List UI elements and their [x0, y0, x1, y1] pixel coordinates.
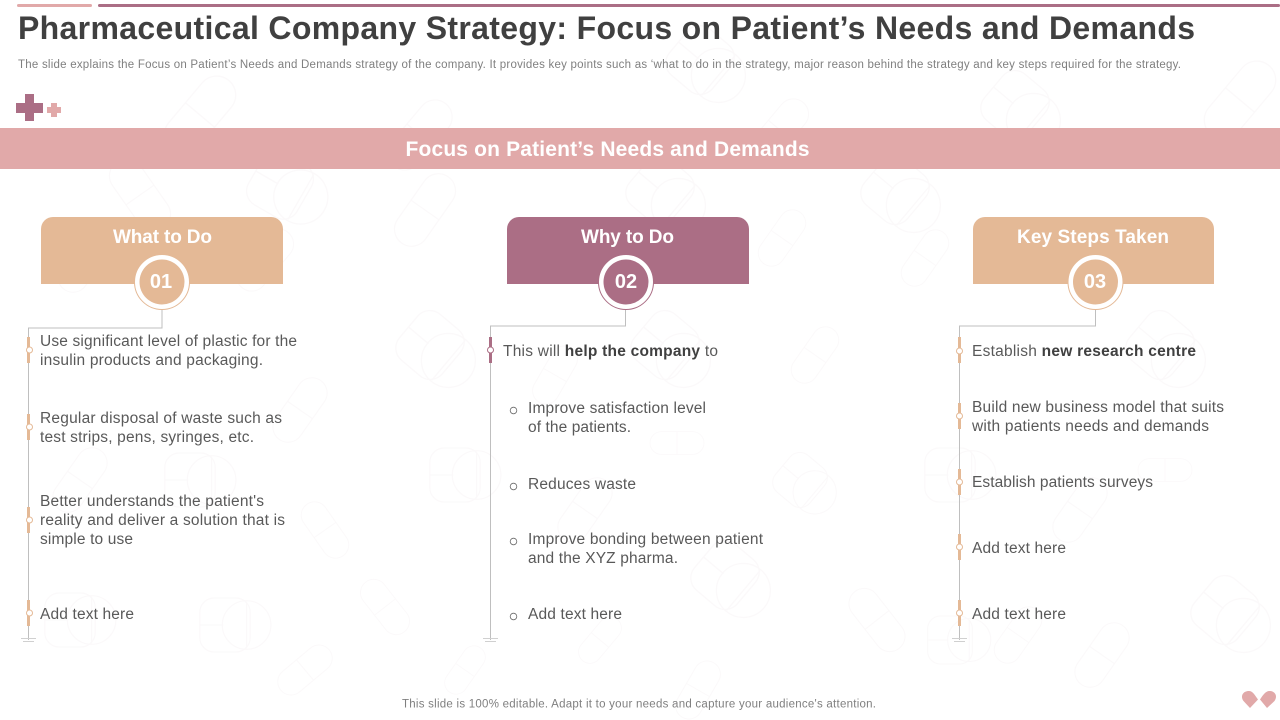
text: key steps items: with patients needs and demands [971, 418, 1209, 435]
text: key steps items: Add text here [972, 606, 1066, 623]
header card: what to do [41, 217, 283, 284]
panel: key steps taken [952, 217, 1224, 642]
text: why to do items: Add text here [528, 606, 622, 623]
header card: key steps taken [973, 217, 1214, 284]
text: what to do items: insulin products and packaging. [40, 352, 263, 369]
panel: what to do [21, 217, 297, 642]
number badge 03: 03 [1084, 271, 1106, 293]
timeline: key steps taken [952, 310, 1096, 642]
text: why to do items: Improve satisfaction level [528, 400, 706, 417]
icon: pink hearts [1242, 691, 1276, 708]
header card: what to do: What to Do [113, 227, 212, 248]
number badge 02 [598, 254, 654, 310]
top accent bars [17, 4, 1280, 7]
banner heading [0, 128, 1280, 169]
text: key steps items: Add text here [972, 540, 1066, 557]
text: what to do items [40, 333, 297, 623]
number badge 01 [134, 254, 190, 310]
number badge 02: 02 [615, 271, 637, 293]
panel: why to do [483, 217, 764, 642]
number badge 03 [1068, 254, 1123, 310]
text: what to do items: Add text here [40, 606, 134, 623]
subtitle: The slide explains the Focus on Patient’s Needs and Demands strategy of the company. It provides key points such as ‘what to do in the strategy, major reason behind the strategy and key steps required for the strategy. [18, 59, 1181, 71]
text: what to do items: test strips, pens, syringes, etc. [40, 429, 254, 446]
text: why to do items: This will help the company to [503, 343, 718, 360]
header card: key steps taken: Key Steps Taken [1017, 227, 1169, 248]
text: what to do items: Use significant level of plastic for the [40, 333, 297, 350]
footer note: This slide is 100% editable. Adapt it to your needs and capture your audience's attention. [402, 698, 876, 710]
timeline: why to do [483, 310, 626, 642]
text: why to do items: Improve bonding between patient [528, 531, 764, 548]
text: key steps items: Establish patients surveys [972, 474, 1153, 491]
text: key steps items: Build new business model that suits [972, 399, 1224, 416]
icon: medical crosses [16, 94, 61, 121]
text: what to do items: simple to use [40, 531, 133, 548]
text: why to do items [503, 343, 764, 623]
banner heading: Focus on Patient’s Needs and Demands [406, 138, 810, 161]
header card: why to do: Why to Do [581, 227, 674, 248]
number badge 01: 01 [150, 271, 172, 293]
text: key steps items [971, 343, 1224, 623]
header card: why to do [507, 217, 749, 284]
text: why to do items: of the patients. [528, 419, 631, 436]
timeline: what to do [21, 310, 162, 642]
text: what to do items: Regular disposal of waste such as [40, 410, 282, 427]
text: what to do items: Better understands the patient's [40, 493, 264, 510]
text: what to do items: reality and deliver a solution that is [40, 512, 285, 529]
text: why to do items: Reduces waste [528, 476, 636, 493]
text: key steps items: Establish new research centre [972, 343, 1196, 360]
title: Pharmaceutical Company Strategy: Focus on Patient’s Needs and Demands [18, 10, 1195, 46]
text: why to do items: and the XYZ pharma. [528, 550, 678, 567]
